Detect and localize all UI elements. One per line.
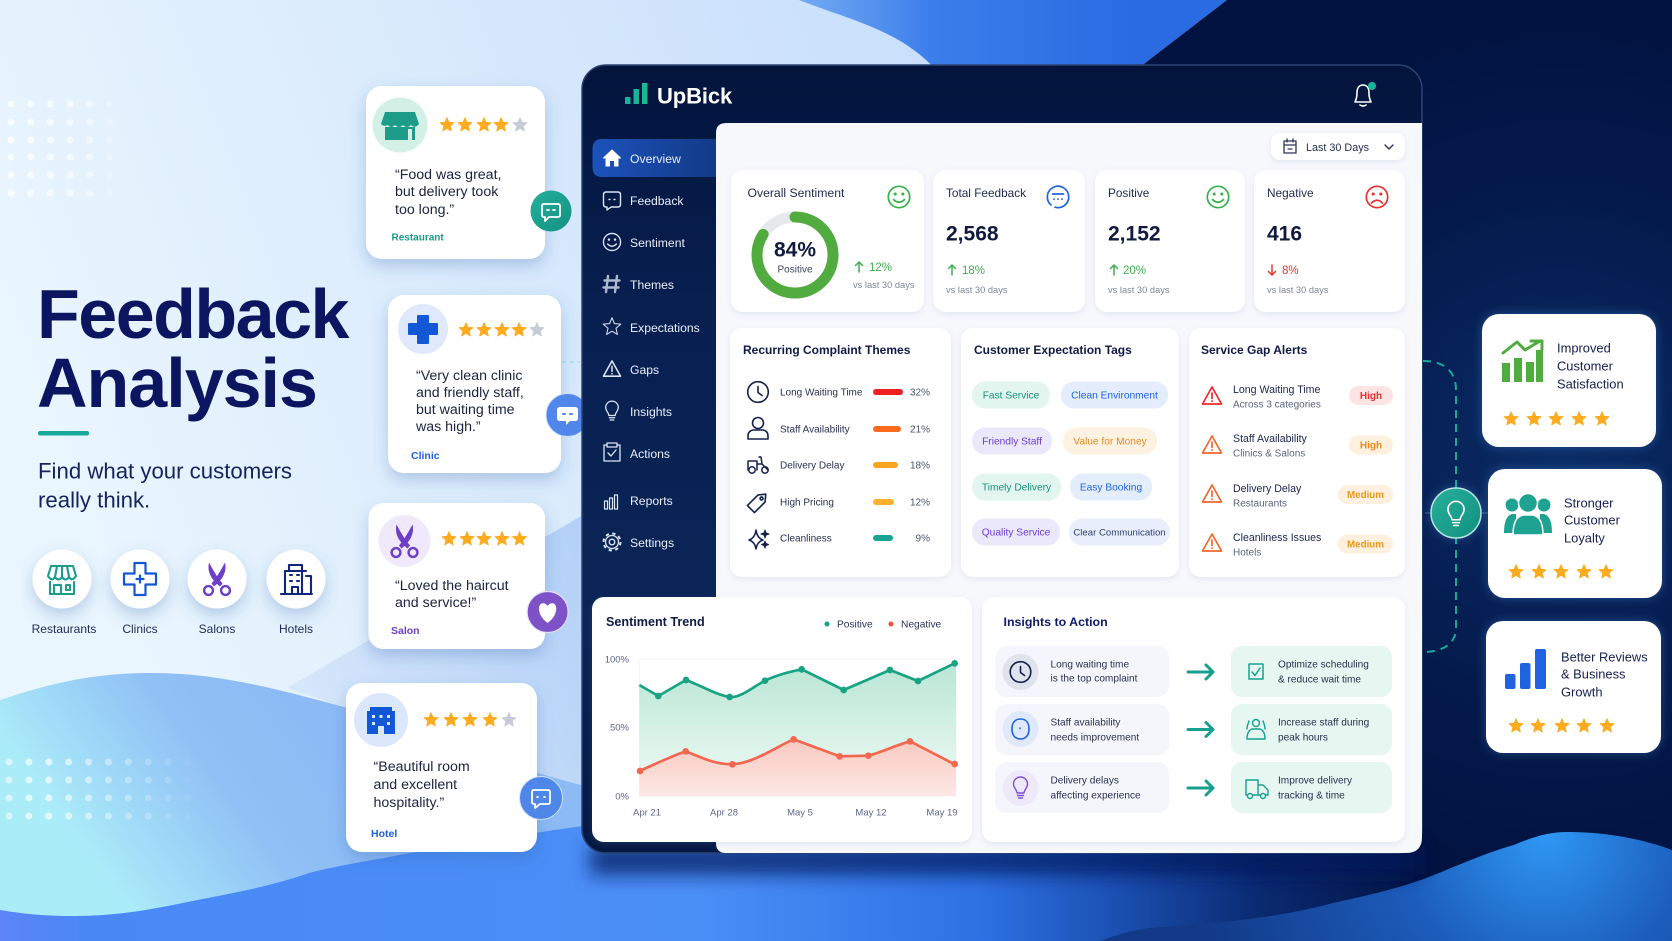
theme: staff availability: [748, 418, 930, 439]
header logo: [625, 83, 733, 108]
dashboard frame: [582, 65, 1422, 853]
category: clinics: Clinics: [122, 622, 158, 636]
theme: long waiting time: Long Waiting Time: [780, 387, 863, 398]
insight row 3: [995, 762, 1169, 813]
category: hotels: Hotels: [279, 622, 313, 636]
stars: [1509, 719, 1614, 732]
alert: long waiting time: Long Waiting Time: [1233, 384, 1320, 396]
action row 2: peak hours: [1278, 732, 1328, 743]
tag: clean environment: Clean Environment: [1071, 390, 1158, 401]
KPI card: negative: 8%: [1282, 265, 1299, 277]
icon: bars: [1505, 649, 1546, 689]
title accent bar: [38, 431, 89, 436]
theme: long waiting time: [748, 382, 930, 402]
outcome card: growth: Better Reviews: [1561, 649, 1648, 664]
alert: delivery delay: Restaurants: [1233, 498, 1287, 509]
outcome card: growth: Growth: [1561, 684, 1603, 699]
alert: delivery delay: Delivery Delay: [1233, 483, 1302, 495]
avatar: store: [372, 98, 428, 152]
outcome card: loyalty: [1488, 469, 1662, 598]
panel: customer expectation tags: [961, 328, 1179, 577]
nav: insights: [606, 401, 672, 420]
theme: high pricing: High Pricing: [780, 497, 834, 508]
tag: clean environment: [1061, 382, 1168, 408]
arrow 1: [1188, 665, 1213, 679]
quote: “Very clean clinic: [416, 368, 522, 384]
panel: recurring complaint themes: Recurring Complaint Themes: [743, 343, 911, 357]
action row 3: tracking & time: [1278, 790, 1345, 801]
panel: insights to action: [982, 597, 1405, 842]
nav: actions: [604, 443, 670, 461]
outcome card: loyalty: Loyalty: [1564, 530, 1605, 545]
alert: cleanliness issues: Medium: [1347, 539, 1384, 550]
donut chart: [757, 217, 833, 293]
review card: salon: [368, 503, 568, 649]
legend: Negative: [901, 619, 942, 630]
avatar: building: [354, 693, 408, 747]
notification bell: [1355, 82, 1376, 106]
alert: staff availability: Staff Availability: [1233, 433, 1308, 445]
quote: “Food was great,: [395, 167, 501, 183]
tag: quality service: Quality Service: [982, 527, 1051, 538]
badge: heart: [527, 592, 568, 632]
quote: and service!”: [395, 595, 476, 611]
nav: reports: Reports: [630, 494, 673, 508]
donut chart: Positive: [777, 264, 813, 275]
nav: settings: [604, 534, 674, 550]
connector: left dashes: [562, 361, 580, 363]
panel: recurring complaint themes: [730, 328, 951, 577]
badge: chat: [520, 776, 562, 820]
axis labels: 50%: [610, 722, 630, 733]
KPI card: total feedback: 18%: [962, 265, 985, 277]
theme: long waiting time: 32%: [910, 387, 930, 398]
quote: [395, 167, 501, 218]
axis labels: May 5: [787, 807, 813, 818]
subtitle: [38, 458, 292, 512]
nav: gaps: Gaps: [630, 363, 659, 377]
KPI card: total feedback: 2,568: [946, 222, 999, 245]
theme: delivery delay: [748, 457, 930, 473]
alert: staff availability: High: [1360, 440, 1382, 451]
theme: delivery delay: 18%: [910, 460, 930, 471]
stars: [459, 323, 544, 336]
nav: expectations: Expectations: [630, 321, 700, 335]
stars: [1509, 565, 1613, 578]
theme: high pricing: [747, 491, 930, 513]
alert: staff availability: [1202, 433, 1393, 459]
category: salons: Salons: [199, 622, 235, 636]
alert: delivery delay: Medium: [1347, 490, 1384, 501]
category: restaurants: [32, 550, 96, 636]
negative series: [637, 736, 958, 774]
KPI card: positive: 20%: [1123, 265, 1146, 277]
KPI card: overall sentiment: Overall Sentiment: [748, 186, 845, 200]
review card: clinic: [388, 295, 589, 473]
dot pattern top-left: [11, 104, 120, 193]
theme: cleanliness: Cleanliness: [780, 533, 832, 544]
theme: staff availability: 21%: [910, 424, 930, 435]
tag: friendly staff: Friendly Staff: [982, 436, 1042, 447]
axis labels: Apr 21: [633, 807, 661, 818]
review card: hotel: [346, 683, 562, 852]
axis labels: Apr 28: [710, 807, 738, 818]
badge: chat: [546, 394, 589, 436]
header logo: UpBick: [657, 83, 733, 108]
quote: “Beautiful room: [374, 759, 470, 775]
source label: Restaurant: [392, 232, 444, 243]
outcome card: satisfaction: [1482, 314, 1656, 447]
insight row 1: Long waiting time: [1050, 659, 1129, 670]
nav: feedback: [604, 192, 684, 210]
quote: hospitality.”: [374, 795, 444, 811]
KPI card: total feedback: [934, 170, 1085, 312]
quote: “Loved the haircut: [395, 578, 509, 594]
nav: insights: Insights: [630, 405, 672, 419]
source label: Salon: [391, 625, 420, 637]
theme: cleanliness: [749, 530, 930, 549]
insight row 1: is the top complaint: [1050, 673, 1138, 684]
KPI card: total feedback: vs last 30 days: [946, 285, 1008, 295]
tag: easy booking: Easy Booking: [1080, 482, 1142, 493]
alert: delivery delay: [1202, 483, 1393, 509]
tag: timely delivery: Timely Delivery: [982, 482, 1052, 493]
KPI card: negative: Negative: [1267, 186, 1314, 200]
stars: [442, 532, 527, 545]
KPI card: overall sentiment: [731, 170, 924, 312]
quote: [374, 759, 470, 811]
icon: people: [1504, 494, 1552, 535]
KPI card: negative: [1254, 170, 1405, 312]
content area: [716, 123, 1422, 853]
insight bulb node: [1425, 488, 1488, 538]
KPI card: positive: 2,152: [1108, 222, 1161, 245]
sidebar: [592, 139, 716, 550]
insight row 2: [995, 704, 1169, 755]
theme: staff availability: Staff Availability: [780, 424, 850, 435]
panel: service gap alerts: [1189, 328, 1405, 577]
alert: long waiting time: Across 3 categories: [1233, 399, 1321, 410]
tag: fast service: [972, 382, 1050, 408]
action row 3: [1231, 762, 1392, 813]
alert: cleanliness issues: Cleanliness Issues: [1233, 532, 1321, 544]
nav: themes: [604, 276, 674, 292]
panel: customer expectation tags: Customer Expectation Tags: [974, 343, 1132, 357]
nav: expectations: [603, 318, 700, 335]
quote: and friendly staff,: [416, 385, 524, 401]
quote: but delivery took: [395, 184, 499, 200]
action row 1: Optimize scheduling: [1278, 659, 1369, 670]
theme: delivery delay: Delivery Delay: [780, 460, 844, 471]
tag: friendly staff: [972, 428, 1052, 454]
insight row 1: [995, 646, 1169, 697]
icon: growth chart: [1502, 341, 1543, 382]
action row 2: Increase staff during: [1278, 717, 1369, 728]
KPI card: positive: Positive: [1108, 186, 1150, 200]
insight row 2: Staff availability: [1050, 717, 1121, 728]
tag: value for money: Value for Money: [1073, 436, 1148, 447]
axis labels: 100%: [605, 654, 630, 665]
review card: restaurant: [366, 86, 572, 259]
outcome card: loyalty: Customer: [1564, 512, 1621, 527]
nav: overview active: [592, 139, 716, 177]
insight row 3: affecting experience: [1050, 790, 1141, 801]
panel: service gap alerts: Service Gap Alerts: [1201, 343, 1308, 357]
quote: and excellent: [374, 777, 457, 793]
axis labels: 0%: [615, 791, 630, 802]
tag: timely delivery: [972, 474, 1061, 500]
action row 1: & reduce wait time: [1278, 674, 1361, 685]
alert: long waiting time: [1202, 384, 1393, 410]
connector: dashed path: [1423, 361, 1456, 652]
badge: chat: [530, 190, 572, 232]
theme: cleanliness: 9%: [916, 533, 930, 544]
tag: clear communication: [1069, 518, 1170, 546]
stars: [1504, 412, 1609, 425]
KPI card: positive: [1095, 170, 1245, 312]
action row 2: [1231, 704, 1392, 755]
nav: reports: [604, 494, 673, 509]
subtitle: really think.: [38, 487, 150, 512]
axis labels: May 12: [855, 807, 887, 818]
arrow 2: [1188, 722, 1213, 736]
outcome card: growth: [1486, 621, 1661, 753]
category: clinics: [110, 550, 170, 636]
action row 1: [1231, 646, 1392, 697]
category: hotels: [266, 550, 326, 636]
insight row 3: Delivery delays: [1050, 775, 1119, 786]
date range dropdown: [1271, 133, 1405, 160]
outcome card: loyalty: Stronger: [1564, 495, 1614, 510]
avatar: scissors: [378, 515, 430, 567]
subtitle: Find what your customers: [38, 458, 292, 483]
source label: Hotel: [371, 828, 397, 840]
insight row 2: needs improvement: [1050, 732, 1139, 743]
donut chart: 84%: [774, 238, 816, 261]
action row 3: Improve delivery: [1278, 775, 1353, 786]
nav: feedback: Feedback: [630, 194, 684, 208]
alert: cleanliness issues: [1202, 532, 1393, 558]
nav: gaps: [603, 361, 659, 377]
alert: cleanliness issues: Hotels: [1233, 547, 1261, 558]
nav: settings: Settings: [630, 536, 674, 550]
KPI card: positive: vs last 30 days: [1108, 285, 1170, 295]
avatar: cross: [398, 304, 448, 354]
nav: overview active: Overview: [630, 152, 681, 166]
panel: insights to action: Insights to Action: [1004, 615, 1108, 629]
legend: Positive: [837, 619, 873, 630]
KPI card: total feedback: Total Feedback: [946, 186, 1026, 200]
KPI card: overall sentiment: 12%: [869, 262, 892, 274]
tag: clear communication: Clear Communication: [1073, 527, 1166, 538]
axis labels: May 19: [926, 807, 958, 818]
title: Analysis: [37, 344, 317, 422]
outcome card: growth: & Business: [1561, 666, 1626, 681]
stars: [440, 118, 527, 131]
outcome card: satisfaction: Improved: [1557, 340, 1611, 355]
outcome card: satisfaction: Satisfaction: [1557, 376, 1624, 391]
quote: [395, 578, 509, 611]
nav: actions: Actions: [630, 447, 670, 461]
nav: sentiment: [603, 233, 685, 251]
outcome card: satisfaction: Customer: [1557, 358, 1614, 373]
category: restaurants: Restaurants: [32, 622, 96, 636]
title: [37, 275, 349, 422]
source label: Clinic: [411, 450, 440, 462]
KPI card: negative: 416: [1267, 222, 1302, 245]
panel: sentiment trend: Sentiment Trend: [606, 615, 705, 629]
legend: [824, 619, 942, 630]
tag: value for money: [1063, 428, 1157, 454]
line chart: [637, 659, 958, 796]
panel: sentiment trend: [592, 597, 972, 842]
tag: quality service: [972, 518, 1060, 546]
quote: [415, 368, 524, 435]
title: Feedback: [37, 275, 349, 353]
tag: easy booking: [1070, 474, 1152, 500]
arrow 3: [1188, 781, 1213, 795]
KPI card: negative: vs last 30 days: [1267, 285, 1329, 295]
date range dropdown: Last 30 Days: [1306, 142, 1370, 154]
theme: high pricing: 12%: [910, 497, 930, 508]
category: salons: [188, 550, 246, 636]
quote: was high.”: [415, 419, 481, 435]
positive series: [639, 660, 958, 700]
quote: too long.”: [395, 202, 454, 218]
alert: long waiting time: High: [1360, 391, 1382, 402]
alert: staff availability: Clinics & Salons: [1233, 448, 1305, 459]
stars: [424, 713, 516, 726]
nav: sentiment: Sentiment: [630, 236, 685, 250]
axis labels: [605, 654, 958, 818]
dot pattern bottom-left: [9, 762, 195, 816]
nav: themes: Themes: [630, 278, 674, 292]
tag: fast service: Fast Service: [983, 390, 1040, 401]
KPI card: overall sentiment: vs last 30 days: [853, 280, 915, 290]
quote: but waiting time: [416, 402, 515, 418]
